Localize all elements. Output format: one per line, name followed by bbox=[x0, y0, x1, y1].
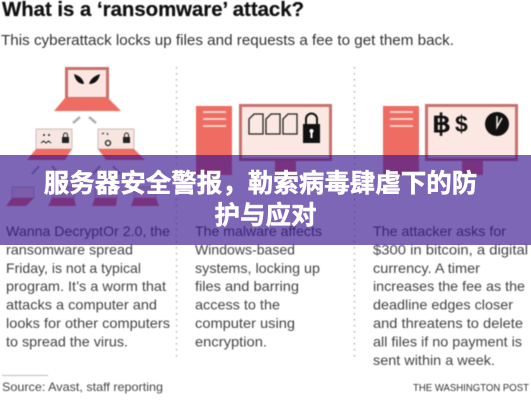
icon: file documents bbox=[249, 114, 297, 134]
icon: dollar symbol: $ bbox=[455, 111, 468, 137]
text block: ransom description: increases the fee as the bbox=[373, 278, 525, 294]
subtitle: This cyberattack locks up files and requests a fee to get them back. bbox=[1, 32, 454, 49]
icon: spreading arrows bbox=[73, 117, 96, 123]
text block: malware description: encryption. bbox=[195, 333, 267, 349]
text block: worm description: program. It’s a worm that bbox=[6, 278, 166, 294]
source note: Source: Avast, staff reporting bbox=[2, 380, 163, 394]
column dividers bbox=[176, 67, 354, 358]
text block: worm description: looks for other computers bbox=[6, 315, 170, 331]
text block: malware description: Windows-based bbox=[195, 241, 295, 257]
icon: second row arrows bbox=[32, 166, 120, 174]
text block: malware description: computer using bbox=[195, 315, 295, 331]
headline banner: 服务器安全警报，勒索病毒肆虐下的防 bbox=[44, 170, 477, 198]
text block: malware description: access to the bbox=[195, 297, 280, 313]
text block: malware description bbox=[195, 223, 322, 349]
icon: monitor bbox=[240, 106, 330, 175]
icon: padlock bbox=[303, 114, 320, 143]
headline banner: 护与应对 bbox=[214, 202, 316, 230]
text block: worm description: to spread the virus. bbox=[6, 333, 128, 349]
icon: monitor bbox=[426, 106, 516, 175]
text block: ransom description: The attacker asks for bbox=[373, 223, 506, 239]
headline banner bbox=[0, 155, 531, 245]
text block: ransom description: all files if no payment is bbox=[373, 333, 522, 349]
icon: shocked infected laptop bbox=[98, 129, 145, 160]
text block: worm description: ransomware spread bbox=[6, 241, 133, 257]
text block: worm description: attacks a computer and bbox=[6, 297, 157, 313]
text block: ransom description: sent within a week. bbox=[373, 352, 495, 368]
icon: attacker laptop bbox=[54, 68, 121, 111]
text block: malware description: The malware affects bbox=[195, 223, 322, 239]
text block: ransom description bbox=[373, 223, 528, 368]
icon: computer tower bbox=[196, 106, 232, 175]
text block: worm description: Friday, is not a typical bbox=[6, 260, 141, 276]
panel: ransom demand bbox=[383, 106, 516, 175]
text block: ransom description: currency. A timer bbox=[373, 260, 480, 276]
text block: ransom description: and threatens to delete bbox=[373, 315, 523, 331]
text block: malware description: systems, locking up bbox=[195, 260, 320, 276]
icon: bitcoin symbol: ฿ bbox=[432, 110, 451, 138]
panel: worm spreading between laptops bbox=[6, 68, 159, 206]
text block: ransom description: $300 in bitcoin, a digital bbox=[373, 241, 528, 257]
text block: worm description bbox=[6, 223, 170, 349]
text block: ransom description: deadline edges closer bbox=[373, 297, 513, 313]
text block: malware description: files and barring bbox=[195, 278, 299, 294]
text block: worm description: Wanna DecryptOr 2.0, the bbox=[6, 223, 170, 239]
icon: computer tower bbox=[383, 106, 419, 175]
icon: sad infected laptop bbox=[27, 129, 72, 160]
icon: second row laptops bbox=[6, 187, 159, 206]
icon: timer clock bbox=[485, 112, 509, 136]
panel: locked computer bbox=[196, 106, 330, 175]
